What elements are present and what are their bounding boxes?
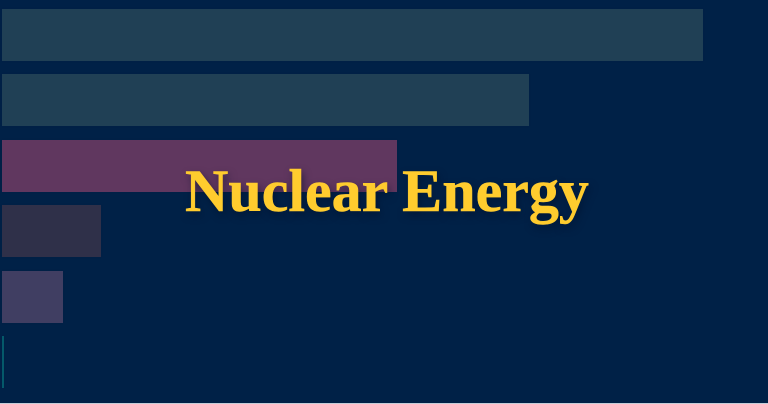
bar 6 [2,336,4,388]
bar 3 [2,140,397,192]
title: Nuclear Energy [185,158,589,224]
bar 5 [2,270,62,322]
bar 1 [2,9,703,61]
bar 2 [2,74,529,126]
bar 4 [2,205,101,257]
